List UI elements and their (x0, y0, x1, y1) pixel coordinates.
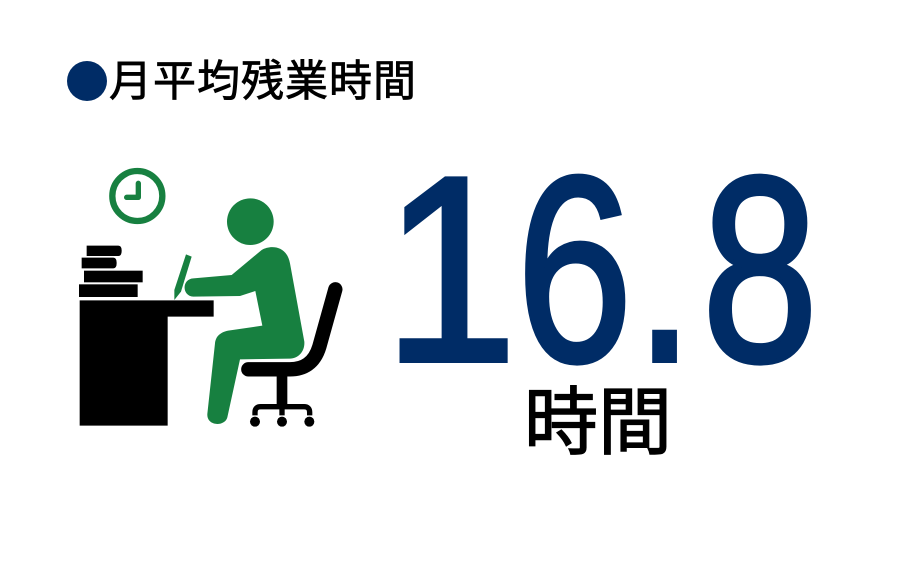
big number: . (634, 122, 695, 417)
big number: 1 (384, 123, 517, 417)
big number (384, 122, 818, 417)
icon: person (185, 198, 304, 424)
icon: pencil (174, 254, 192, 300)
big number: 8 (702, 123, 818, 417)
heading bullet (67, 61, 107, 101)
heading: monthly average overtime hours (67, 58, 417, 106)
icon: clock (112, 171, 162, 221)
icon: office chair (248, 289, 335, 427)
heading text: 月平均残業時間 (109, 58, 417, 106)
icon: desk (80, 300, 214, 426)
big number: 6 (516, 123, 632, 417)
icon: stack of books (79, 246, 143, 297)
unit: hours: 時間 (524, 381, 672, 464)
